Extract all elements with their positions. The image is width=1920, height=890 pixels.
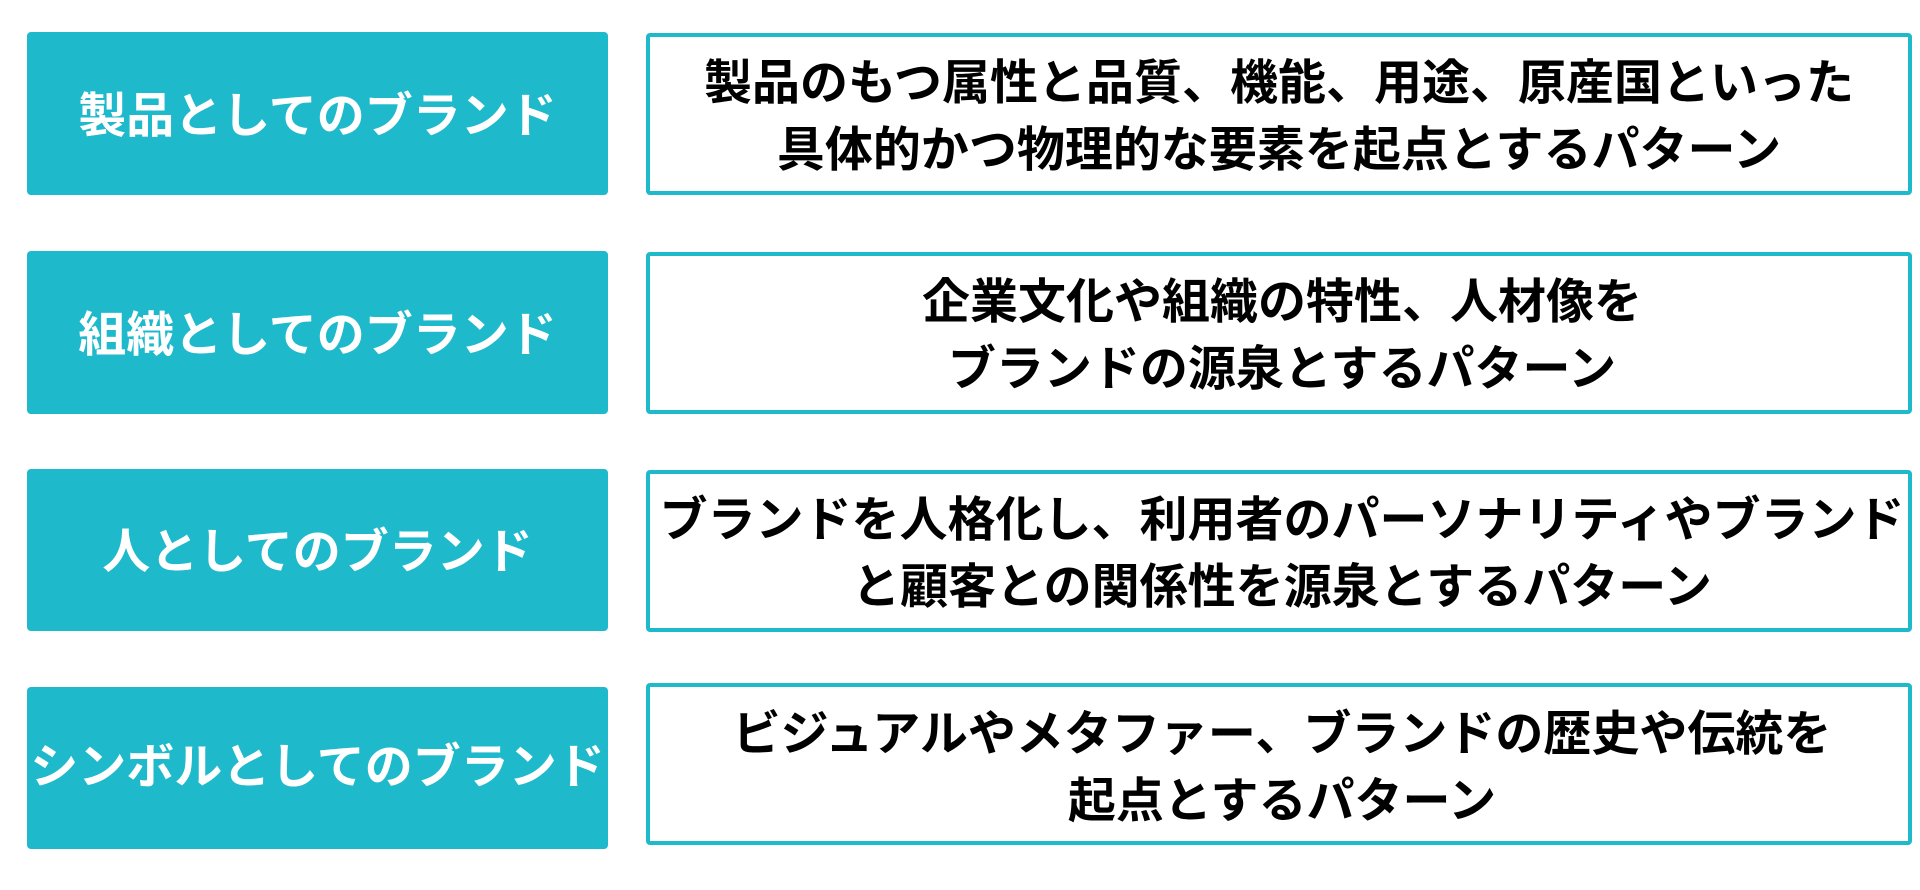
panel: organization description: ブランドの源泉とするパターン	[948, 343, 1616, 396]
panel: product label: 製品としてのブランド	[78, 90, 557, 142]
panel: product label	[27, 32, 608, 195]
panel: symbol description	[646, 683, 1912, 845]
panel: product description: 具体的かつ物理的な要素を起点とするパターン	[777, 124, 1781, 177]
panel: organization description: 企業文化や組織の特性、人材像を	[922, 276, 1642, 329]
panel: symbol description: 起点とするパターン	[1068, 775, 1496, 828]
panel: organization label: 組織としてのブランド	[78, 308, 557, 362]
panel: organization description	[646, 252, 1912, 414]
panel: organization label	[27, 251, 608, 414]
panel: product description: 製品のもつ属性と品質、機能、用途、原産国といった	[704, 57, 1854, 110]
panel: symbol label	[27, 687, 608, 849]
panel: person label: 人としてのブランド	[102, 526, 533, 579]
panel: person description	[646, 470, 1912, 632]
panel: symbol description: ビジュアルやメタファー、ブランドの歴史や伝統を	[733, 708, 1831, 761]
panel: symbol label: シンボルとしてのブランド	[30, 741, 605, 794]
panel: person description: ブランドを人格化し、利用者のパーソナリティやブランド	[659, 494, 1905, 547]
panel: person label	[27, 469, 608, 631]
panel: person description: と顧客との関係性を源泉とするパターン	[852, 561, 1712, 614]
panel: product description	[646, 33, 1912, 195]
